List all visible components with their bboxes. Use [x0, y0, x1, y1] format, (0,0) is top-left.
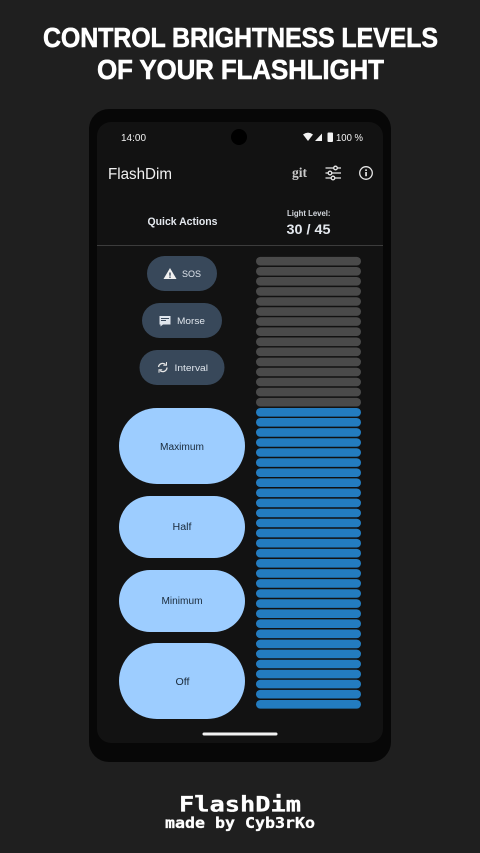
phone body [89, 109, 391, 762]
status bar: 100 % [336, 133, 363, 144]
active levels [256, 408, 361, 709]
button: Half: Half [172, 522, 192, 533]
icon: git: git [292, 166, 307, 181]
inactive levels [256, 257, 361, 406]
footer credits [165, 792, 315, 832]
button: Off [119, 643, 245, 719]
button: Morse [142, 303, 222, 338]
button: Interval: Interval [174, 363, 208, 374]
icon: sync [158, 362, 167, 373]
button: Half [119, 496, 245, 558]
button: Interval [140, 350, 224, 385]
icon: message [160, 316, 170, 326]
button: Maximum: Maximum [160, 442, 204, 453]
icon: settings sliders [326, 166, 341, 180]
app bar: FlashDim [108, 166, 172, 183]
button: Off: Off [176, 677, 190, 688]
home indicator [202, 732, 278, 736]
light level readout [286, 208, 331, 237]
chart: light level bars [256, 257, 361, 709]
status bar [121, 129, 363, 145]
panel: app screen [97, 122, 383, 743]
title: CONTROL BRIGHTNESS LEVELS [43, 22, 438, 53]
heading: quick actions: Quick Actions [148, 216, 218, 228]
button: Minimum [119, 570, 245, 632]
icon: warning [164, 268, 176, 279]
app bar [108, 166, 372, 183]
icon: front camera [231, 129, 247, 145]
title [43, 22, 438, 85]
button: Maximum [119, 408, 245, 484]
light level readout: Light Level: [287, 208, 331, 218]
button: SOS: SOS [182, 269, 201, 280]
footer credits: FlashDim [179, 792, 301, 818]
light level readout: 30 / 45 [286, 221, 331, 237]
button: Morse: Morse [177, 316, 205, 327]
icon: status indicators [303, 132, 333, 142]
title: OF YOUR FLASHLIGHT [97, 54, 384, 85]
button: SOS [147, 256, 217, 291]
icon: info [360, 167, 372, 179]
footer credits: made by Cyb3rKo [165, 814, 315, 832]
status bar: 14:00 [121, 133, 146, 144]
button: Minimum: Minimum [162, 596, 202, 607]
